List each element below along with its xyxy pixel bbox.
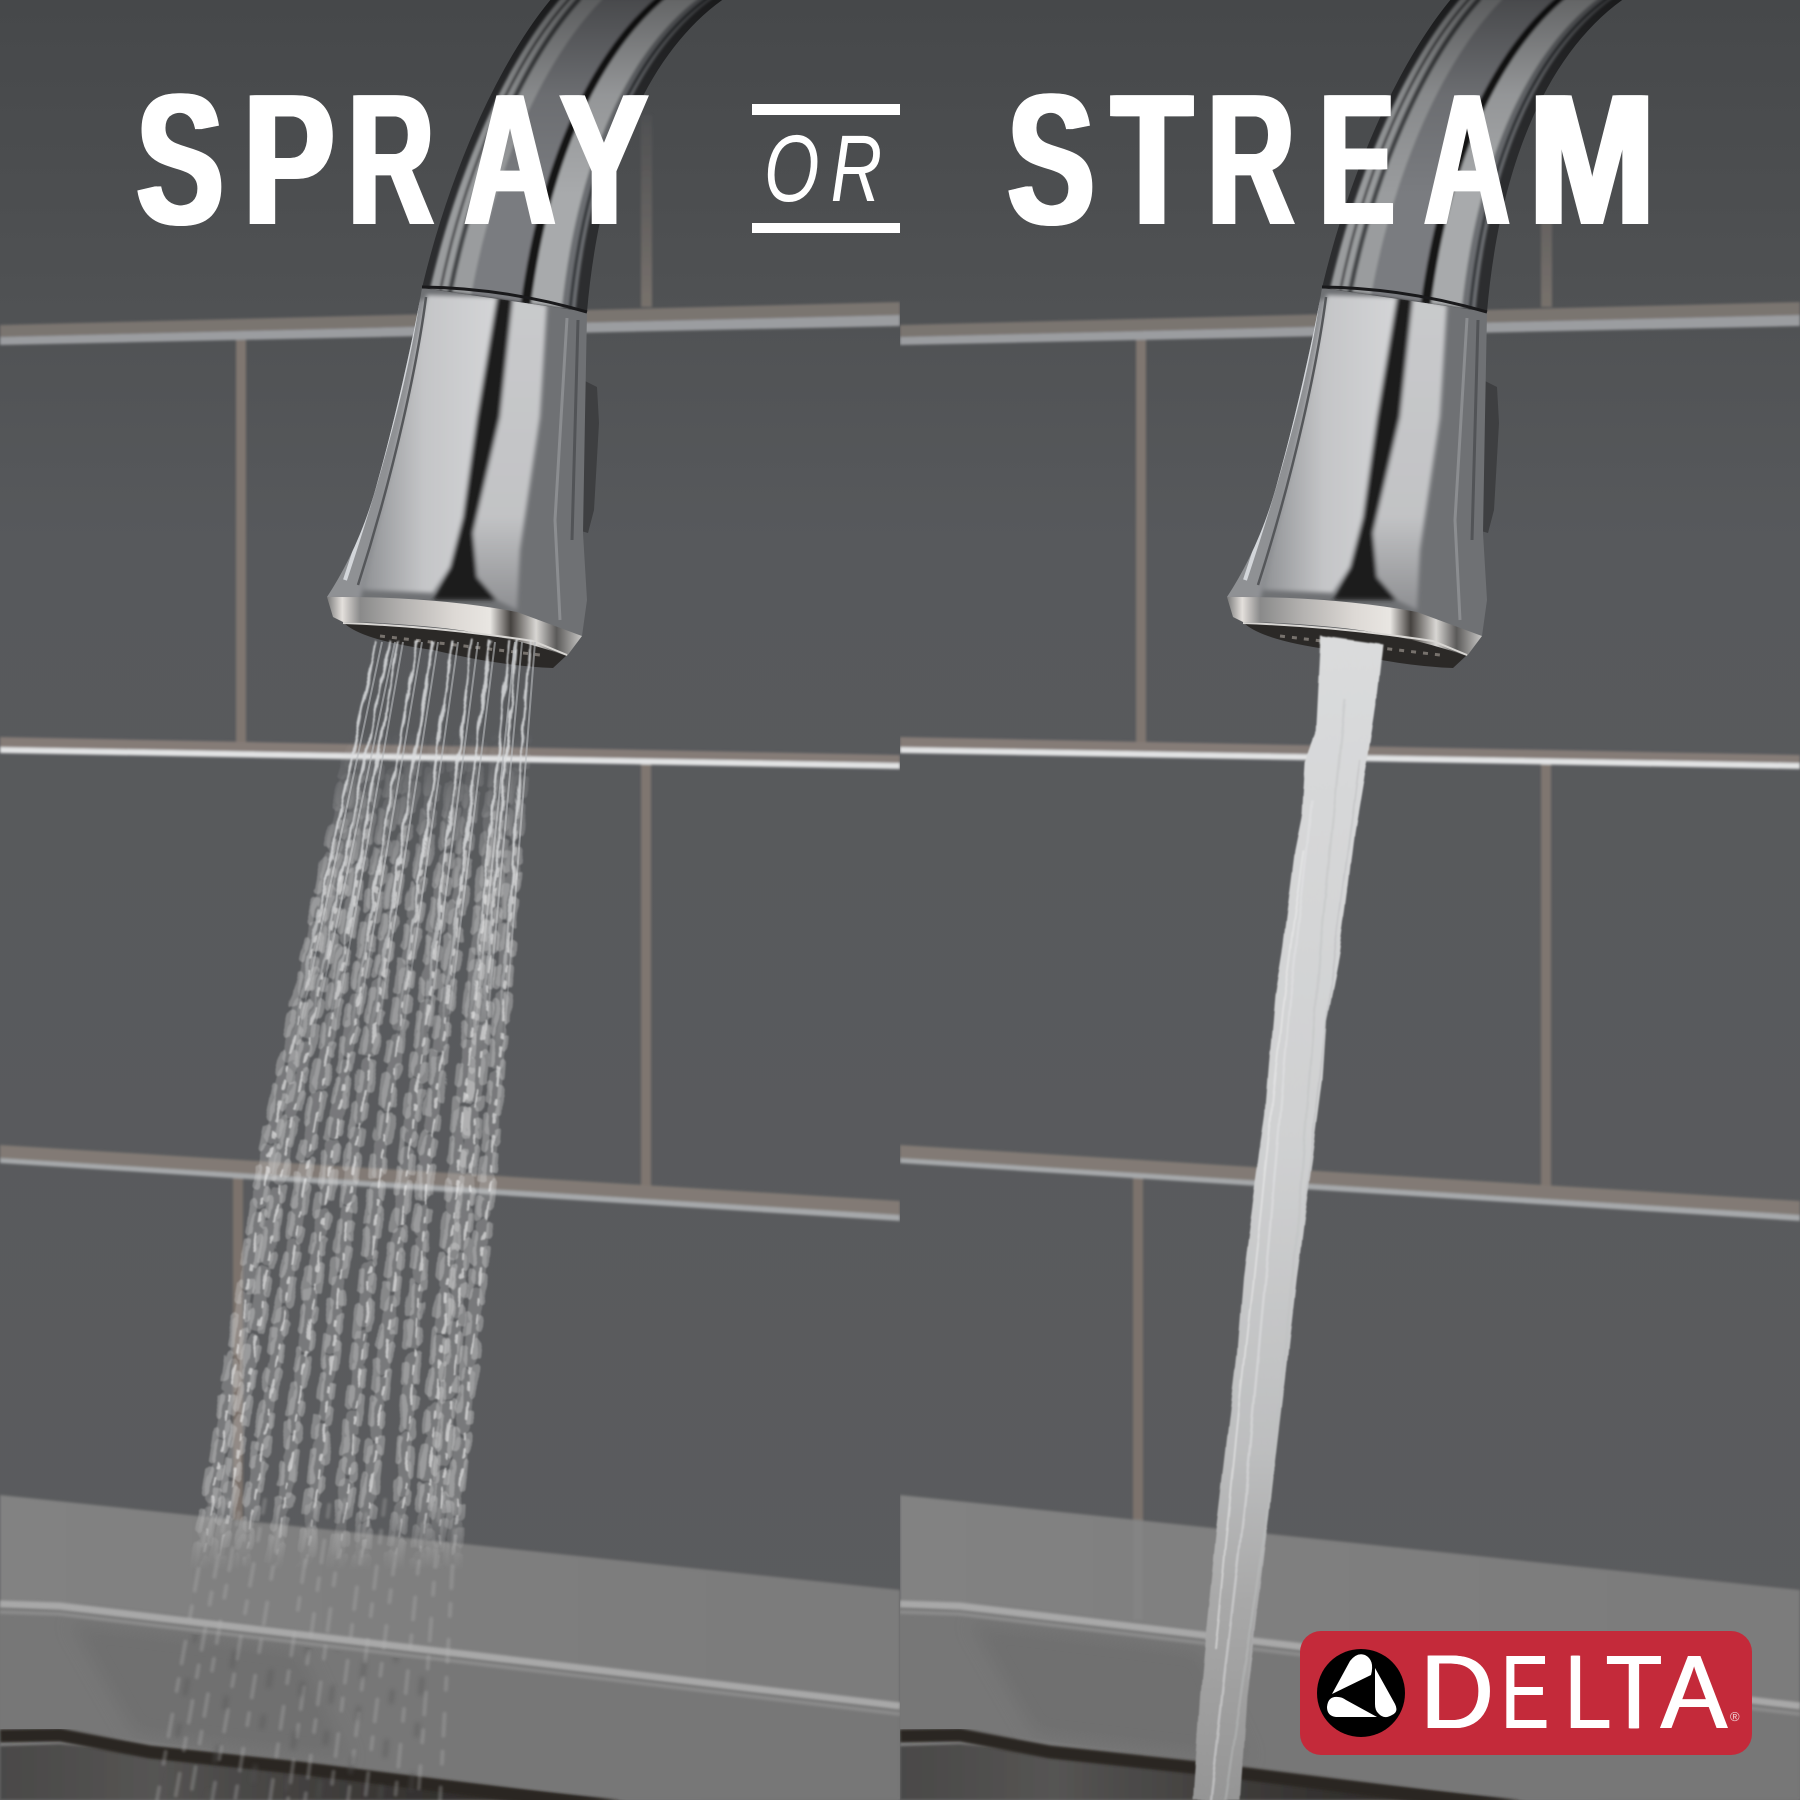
title: STREAM: S <box>1007 55 1094 264</box>
title: SPRAY: A <box>464 55 556 264</box>
water stream <box>1193 636 1383 1800</box>
logo: Delta badge <box>1300 1631 1752 1755</box>
title: STREAM: T <box>1111 55 1193 264</box>
wordmark: DELTA: A <box>1660 1634 1727 1751</box>
title: STREAM <box>1007 55 1655 264</box>
title: STREAM: A <box>1423 55 1510 264</box>
title: STREAM: R <box>1207 55 1295 264</box>
water spray jets <box>151 640 536 1800</box>
wordmark: DELTA: L <box>1564 1634 1611 1751</box>
wordmark: DELTA <box>1420 1634 1740 1751</box>
OR label: OR <box>764 116 893 222</box>
reflection of grout on sink <box>1133 1520 1143 1620</box>
OR divider bottom bar <box>752 223 900 233</box>
title: STREAM: E <box>1319 55 1395 264</box>
OR divider top bar <box>752 104 900 115</box>
panel: stream side <box>900 0 1800 1800</box>
wordmark: DELTA: T <box>1605 1634 1662 1751</box>
title: SPRAY: R <box>348 55 434 264</box>
wordmark: DELTA: D <box>1420 1634 1494 1751</box>
icon: Delta triangle mark <box>1317 1649 1405 1737</box>
logo: Delta badge: ® <box>1730 1709 1740 1724</box>
panel: spray side <box>0 0 900 1800</box>
title: SPRAY <box>136 55 649 264</box>
title: SPRAY: Y <box>559 55 648 264</box>
wordmark: DELTA: E <box>1501 1634 1549 1751</box>
title: SPRAY: P <box>243 55 335 264</box>
title: STREAM: M <box>1529 55 1655 264</box>
title: SPRAY: S <box>136 55 224 264</box>
